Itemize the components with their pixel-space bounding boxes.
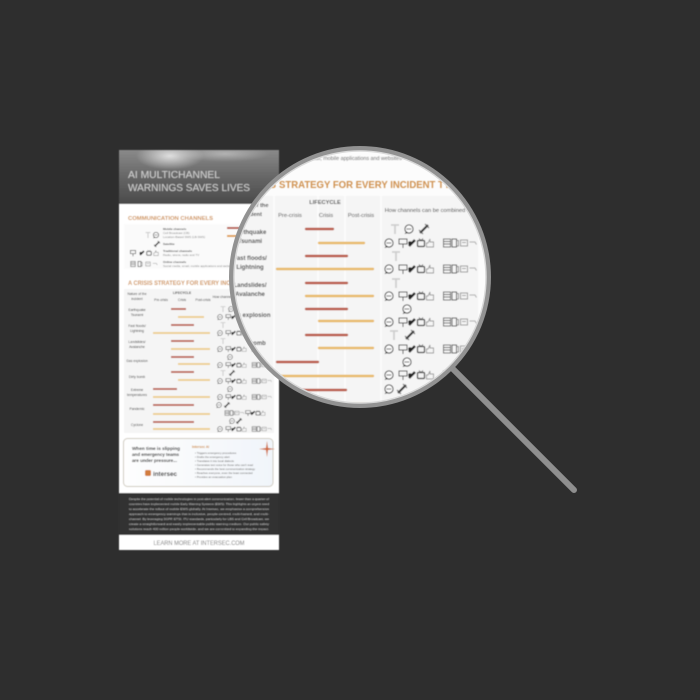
row labels: Gas explosion: [126, 359, 148, 363]
panel: communication channels: Mobile channels: [163, 227, 187, 231]
heading: communication channels: COMMUNICATION CHANNELS: [128, 216, 214, 222]
magnified column headers: How channels can be combined: [385, 208, 465, 214]
callout message: are under pressure...: [132, 458, 178, 464]
dark text block: approach to emergency warnings that is inclusive, people-centred, multi-hazard, and multi-: [129, 512, 269, 516]
intersec AI list: • Drafts the emergency alert: [195, 455, 230, 459]
callout message: When time is slipping: [132, 446, 180, 452]
magnified heading: A CRISIS: [233, 180, 276, 191]
table headers: LIFECYCLE: [173, 291, 192, 295]
magnified row labels: Fast floods/: [233, 256, 267, 262]
intersec AI list: • Triggers emergency procedures: [195, 451, 237, 455]
table headers: [127, 291, 260, 302]
magnified row labels: Lightning: [236, 265, 264, 271]
magnifier handle: [453, 369, 574, 490]
magnified channel caption: Social media, email, mobile applications and websites: [273, 156, 402, 162]
table headers: Crisis: [178, 298, 186, 302]
intersec AI list: • Translates it into local dialects: [195, 459, 235, 463]
magnified row labels: Dirty bomb: [234, 341, 266, 347]
dark text block: channel. By leveraging 3GPP, ETSI, ITU standards, particularly for LBS and Cell Broadcast, we: [129, 517, 270, 521]
panel: communication channels: [124, 224, 274, 269]
panel: communication channels: Online channels: [163, 260, 187, 264]
magnified heading: [272, 180, 448, 189]
magnified column headers: Crisis: [319, 213, 333, 219]
strategy table: [124, 289, 274, 433]
magnified column headers: Nature of the: [233, 203, 269, 209]
channel icons: [216, 307, 272, 432]
panel: communication channels: Social media, email, mobile applications and websites: [163, 264, 235, 268]
magnified content: [225, 156, 478, 416]
row labels: Cyclone: [131, 423, 143, 427]
magnified column headers: Post-crisis: [348, 213, 374, 219]
footer link: LEARN MORE AT INTERSEC.COM: [154, 540, 244, 547]
row labels: Earthquake: [128, 308, 146, 312]
row labels: Tsunami: [131, 313, 144, 317]
intersec logo: intersec: [153, 471, 177, 478]
panel: communication channels: Satellite: [163, 242, 175, 246]
magnified heading: STRATEGY FOR EVERY INCIDENT TYPE: [279, 180, 463, 191]
magnifier lens: [225, 146, 491, 416]
row labels: Avalanche: [129, 345, 145, 349]
header banner: [119, 142, 279, 204]
table headers: Nature of the: [127, 292, 147, 296]
panel: communication channels: Radio, sirens, radio and TV: [163, 253, 199, 257]
header banner: WARNINGS SAVES LIVES: [128, 182, 250, 194]
dark text block: countries have implemented mobile Early Warning Systems (EWS). This highlights an urgent need: [129, 502, 270, 506]
row labels: [126, 308, 148, 427]
intersec logo: [145, 470, 177, 478]
magnified row labels: Landslides/: [233, 283, 267, 289]
magnified lifecycle bars: [277, 229, 373, 404]
panel: communication channels: Cell Broadcast (CB): [163, 231, 190, 235]
magnified column headers: Pre-crisis: [278, 213, 302, 219]
row labels: Lightning: [130, 329, 144, 333]
header banner: AI MULTICHANNEL: [128, 169, 220, 181]
magnified row labels: Gas explosion: [229, 313, 271, 319]
intersec AI list: • Reaches everyone, even the least connected: [195, 471, 253, 475]
lifecycle bars: [153, 309, 210, 429]
callout message: and emergency teams: [132, 452, 179, 458]
intersec AI list: • Provides an evacuation plan: [195, 475, 232, 479]
infographic document: [119, 142, 279, 550]
magnified column headers: [250, 200, 466, 218]
magnified row labels: [234, 229, 271, 346]
intersec AI list: [192, 445, 256, 479]
row labels: Landslides/: [128, 340, 146, 344]
magnified channel icons: [384, 224, 476, 394]
dark text block: to accelerate the rollout of mobile EWS globally. At Intersec, we emphasise a comprehensive: [129, 507, 270, 511]
dark text block: create a straightforward and easily implementable public warning medium. Our public safety: [129, 522, 270, 526]
row labels: Extreme: [131, 388, 143, 392]
magnified row labels: Avalanche: [235, 292, 266, 298]
callout message: [132, 446, 180, 464]
panel: communication channels: Location-Based SMS (LB-SMS): [163, 235, 205, 239]
dark text block: [119, 493, 279, 535]
intersec AI list: Intersec AI: [192, 445, 209, 449]
heading: crisis strategy: A CRISIS STRATEGY FOR EVERY INCIDENT TYPE: [128, 281, 264, 287]
table headers: How channels can be combined: [213, 295, 260, 299]
row labels: Dirty bomb: [129, 375, 145, 379]
table headers: incident: [131, 297, 143, 301]
icon: orange star: [259, 441, 275, 457]
callout: when time is slipping: [124, 438, 275, 486]
magnified row labels: Tsunami: [238, 239, 262, 245]
magnified row labels: Earthquake: [234, 230, 267, 236]
table headers: Post-crisis: [195, 298, 211, 302]
row labels: Fast floods/: [128, 324, 146, 328]
dark text block: Despite the potential of mobile technologies in post-alert communication, fewer than a quarter of: [129, 497, 269, 501]
magnified column headers: LIFECYCLE: [309, 200, 341, 206]
intersec AI list: • Recommends the best communication strategy: [195, 467, 256, 471]
magnified column headers: incident: [240, 212, 262, 218]
intersec AI list: • Generates text voice for those who can't read: [195, 463, 253, 467]
row labels: Pandemic: [129, 407, 145, 411]
panel: communication channels: Traditional channels: [163, 249, 192, 253]
table headers: Pre-crisis: [154, 298, 168, 302]
dark text block: solutions reach 400 million people worldwide, and we are committed to expanding the impact.: [129, 527, 269, 531]
row labels: temperatures: [127, 393, 147, 397]
